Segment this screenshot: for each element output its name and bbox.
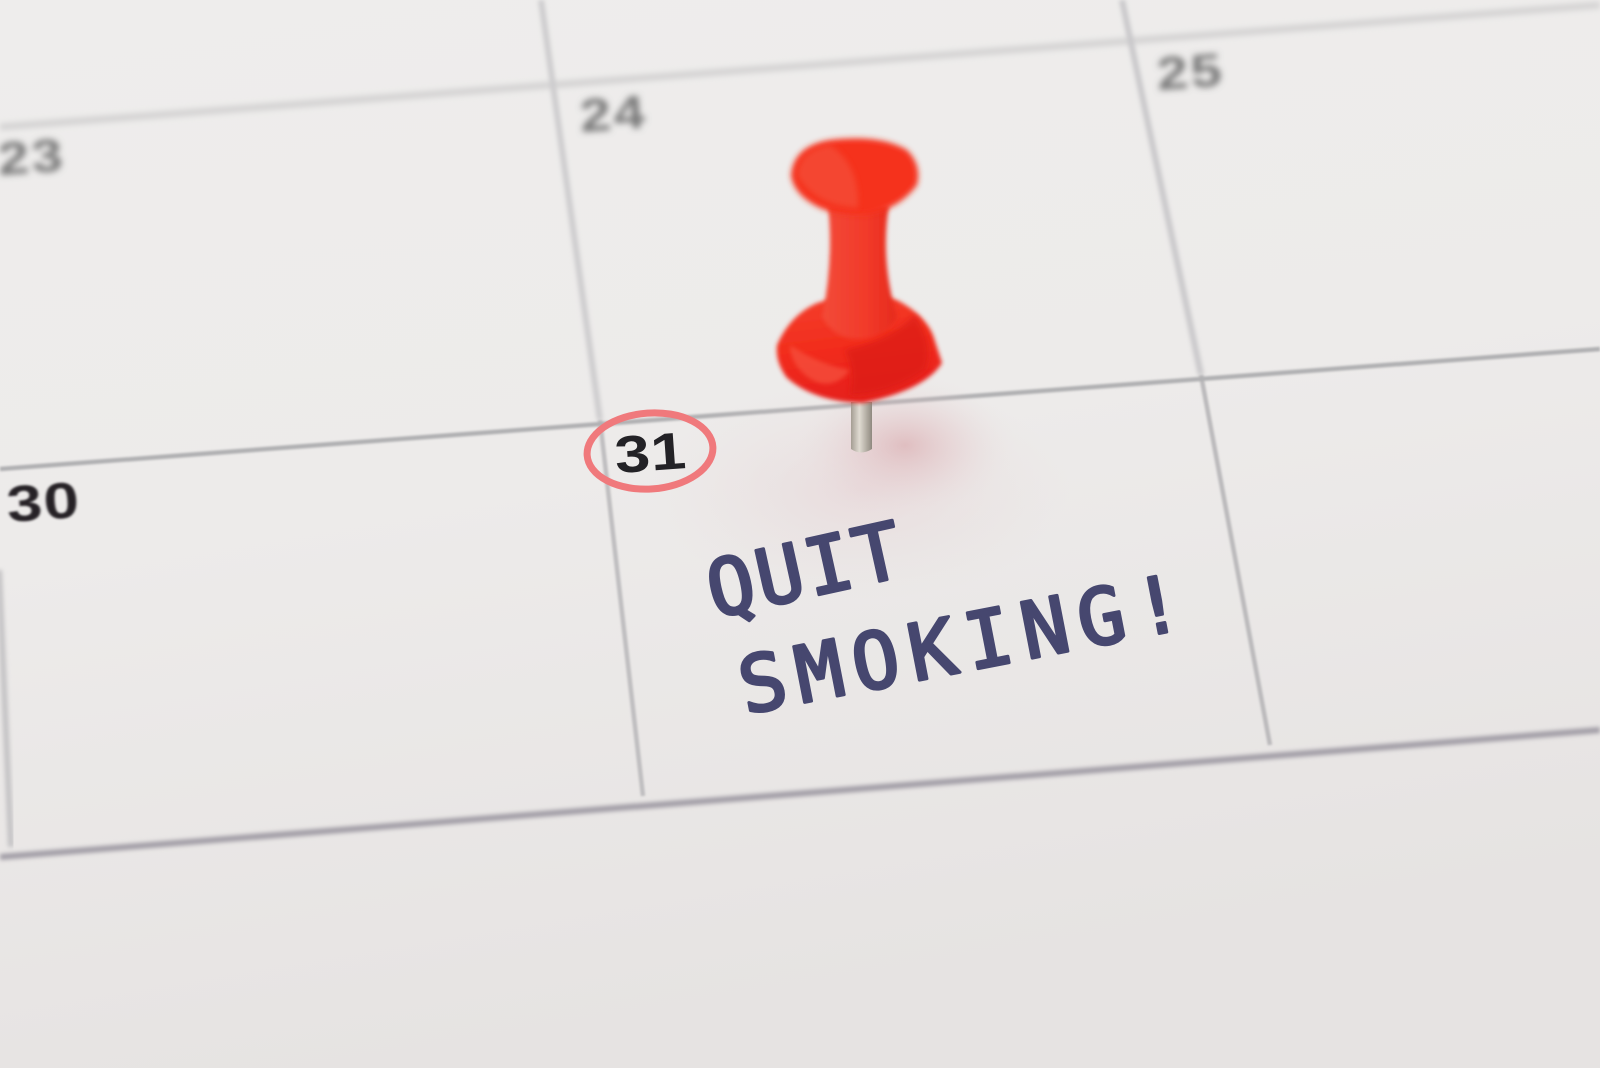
pin base xyxy=(777,296,942,403)
date numbers, out of focus: 25 xyxy=(1155,44,1226,100)
word: QUIT: QUIT xyxy=(699,505,913,637)
date number 30: 30 xyxy=(5,472,82,533)
pin base dark band xyxy=(845,315,928,395)
pin cast shadow haze xyxy=(650,380,1070,600)
pin needle xyxy=(851,402,872,452)
number 31: 31 xyxy=(613,421,688,485)
pin base highlight xyxy=(790,345,850,384)
date numbers, out of focus xyxy=(0,44,1226,185)
red push pin xyxy=(777,138,942,452)
date number 31 with red circle xyxy=(585,409,715,493)
red pencil circle xyxy=(585,409,715,493)
handwritten note: quit smoking xyxy=(699,505,1200,733)
pin head xyxy=(791,138,918,214)
word: SMOKING!: SMOKING! xyxy=(731,557,1200,733)
pin stem xyxy=(822,205,897,339)
pin cast shadow xyxy=(795,373,1015,517)
pin head highlight xyxy=(797,145,858,208)
date numbers, out of focus: 24 xyxy=(578,86,649,142)
